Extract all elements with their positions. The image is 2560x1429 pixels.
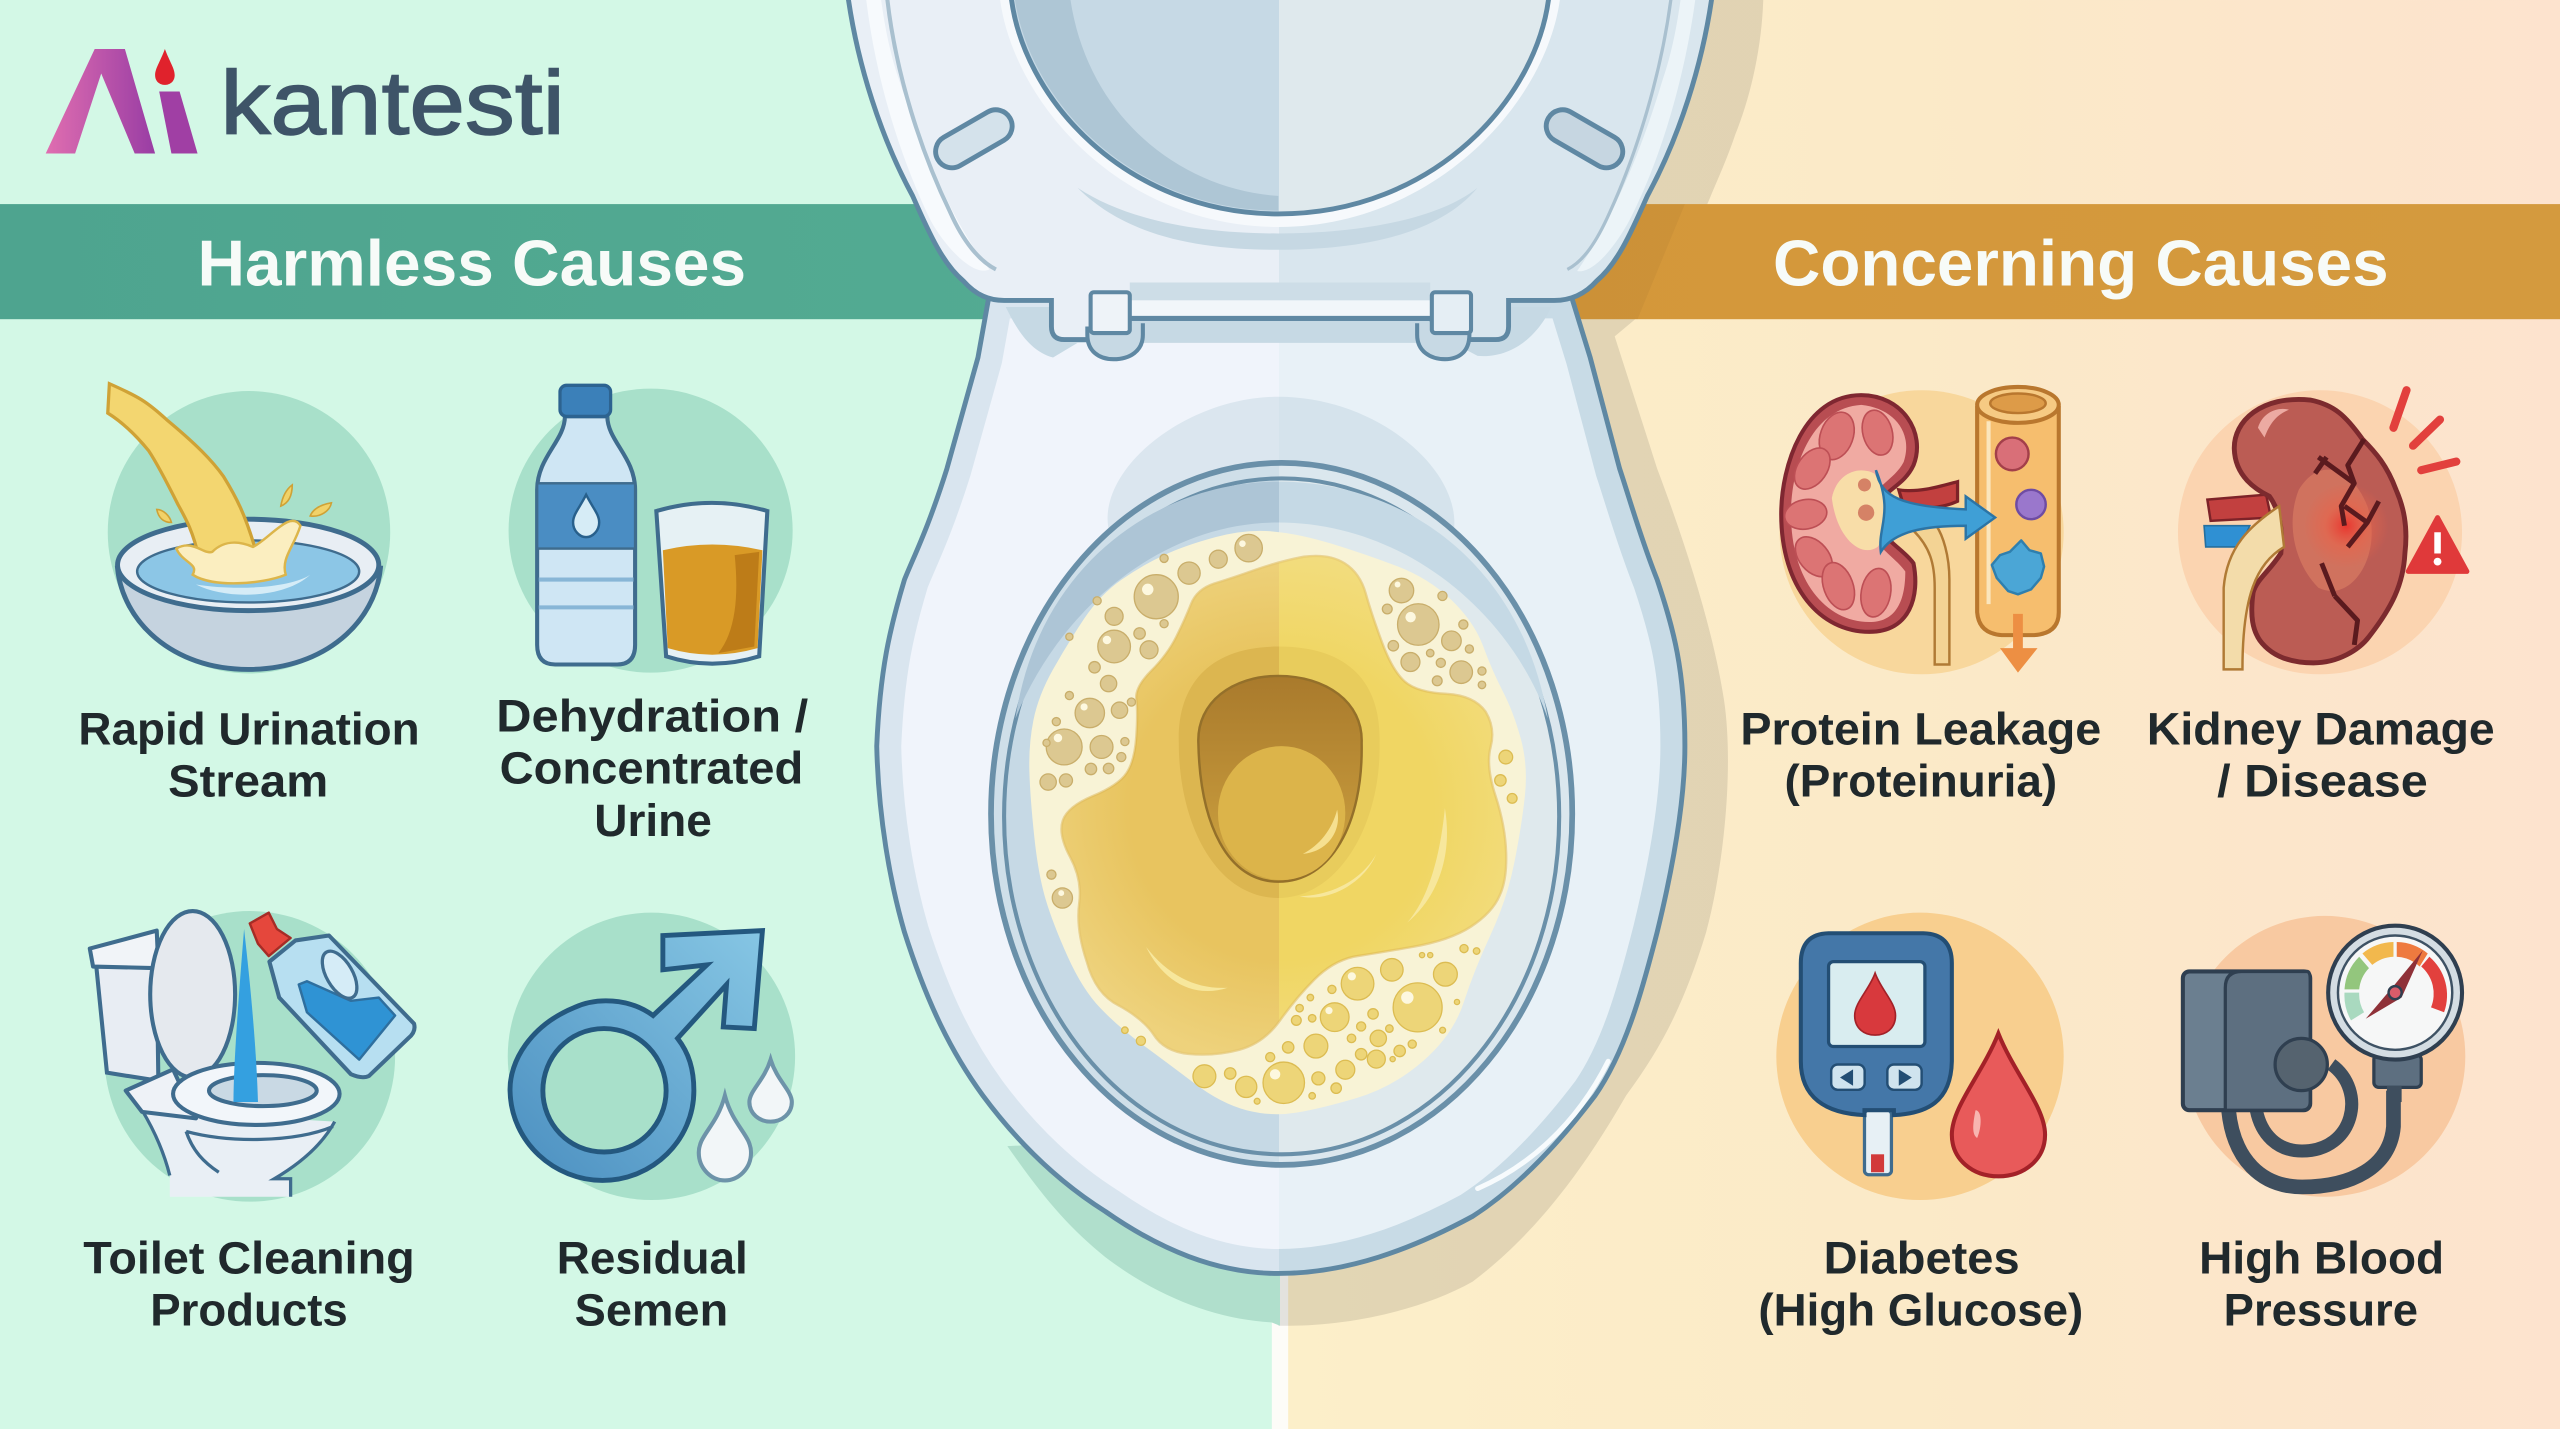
harmless causes banner (0, 204, 1045, 319)
item: toilet cleaning products: Products (150, 1285, 348, 1336)
item: rapid urination stream: Stream (168, 756, 328, 807)
heading: Harmless Causes: Harmless Causes (198, 227, 746, 300)
foam bubbles, upper (1040, 534, 1486, 908)
label: Protein Leakage (1740, 703, 2101, 754)
icon: kidney and tubule (1780, 387, 2064, 674)
concerning causes banner (1518, 204, 2560, 319)
item: protein leakage (1740, 387, 2101, 807)
item: protein leakage: (Proteinuria) (1784, 756, 2057, 807)
bubble highlights (1054, 540, 1416, 1080)
toilet illustration (847, 0, 1713, 1273)
centre divider (1272, 1241, 1288, 1429)
logo mark (46, 49, 198, 153)
item: diabetes (1758, 913, 2083, 1336)
logo: kantesti (46, 49, 565, 154)
icon: glucose meter and blood drop (1776, 913, 2064, 1200)
icon: bowl and stream (108, 384, 390, 673)
item: dehydration: Concentrated (500, 743, 803, 794)
interior top shade (1016, 482, 1548, 718)
foam (1029, 531, 1526, 1114)
item: dehydration (496, 385, 808, 846)
background: concerning side (1287, 0, 2560, 1429)
highlights on urine (1146, 808, 1447, 991)
item: rapid urination stream (78, 384, 420, 807)
item: residual semen (508, 913, 795, 1336)
background: harmless side (0, 0, 1273, 1429)
label: Toilet Cleaning (83, 1232, 415, 1283)
lid opening (999, 0, 1561, 227)
toilet bowl body (877, 294, 1685, 1273)
lid stopper left (930, 104, 1018, 174)
label: High Blood (2199, 1232, 2444, 1283)
urine pool lighter rim (1062, 556, 1506, 1054)
lid hinge plate shade (1130, 282, 1430, 300)
bowl outer rim band (877, 294, 1685, 1273)
seat highlight (1478, 1061, 1608, 1189)
label: Dehydration / (496, 690, 808, 741)
bowl interior (991, 463, 1572, 1165)
label: Residual (557, 1232, 748, 1283)
icon: blood pressure cuff and gauge (2183, 916, 2465, 1197)
toilet shadow (1007, 0, 1763, 1326)
item: toilet cleaning products (83, 911, 415, 1336)
icon: damaged kidney (2178, 390, 2467, 674)
icon: male symbol and droplets (508, 913, 795, 1200)
item: kidney damage: / Disease (2217, 756, 2428, 807)
item: kidney damage (2147, 390, 2495, 807)
logo wordmark: kantesti (220, 54, 565, 154)
hinges (1087, 292, 1471, 359)
foam bubbles, lower (1122, 750, 1517, 1104)
heading: Concerning Causes: Concerning Causes (1773, 227, 2389, 300)
lid stopper right (1540, 104, 1629, 174)
under-lid shadow (1006, 307, 1551, 358)
item: high blood pressure: Pressure (2224, 1285, 2418, 1336)
label: Diabetes (1824, 1232, 2020, 1283)
icon: toilet and cleaner bottle (90, 911, 415, 1202)
drain (1179, 647, 1380, 898)
toilet lid (847, 0, 1713, 340)
item: high blood pressure (2183, 916, 2465, 1336)
urine pool (1061, 556, 1506, 1055)
seat crescent shade (1108, 397, 1454, 536)
lid shadow crescent (1078, 188, 1478, 250)
item: diabetes: (High Glucose) (1758, 1285, 2083, 1336)
item: dehydration: Urine (594, 795, 712, 846)
icon: bottle and glass (509, 385, 793, 673)
item: residual semen: Semen (575, 1285, 728, 1336)
label: Rapid Urination (78, 703, 420, 754)
label: Kidney Damage (2147, 703, 2495, 754)
lid inner edge highlight (865, 0, 989, 271)
